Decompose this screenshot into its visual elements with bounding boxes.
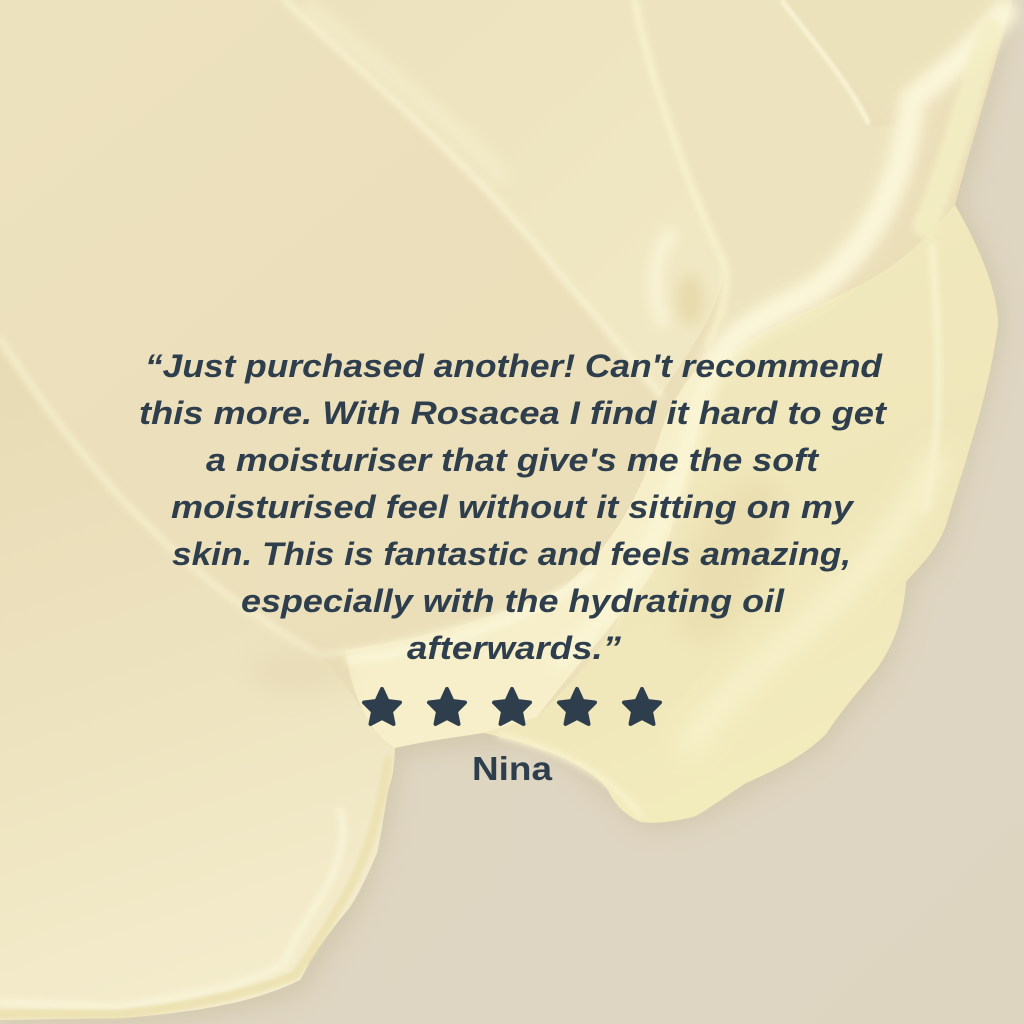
star 3 <box>494 689 530 724</box>
highlight: top band <box>310 8 500 175</box>
highlight: bright curling fold <box>715 12 1005 362</box>
testimonial quote: especially with the hydrating oil <box>241 583 785 619</box>
highlight: central pillar <box>655 235 670 320</box>
testimonial quote: this more. With Rosacea I find it hard to get <box>139 395 888 431</box>
cream: upper right panel <box>635 0 905 362</box>
five star rating <box>364 689 660 724</box>
testimonial quote: afterwards.” <box>407 630 621 666</box>
highlight: lobe top band <box>350 575 590 660</box>
highlight: ridge left <box>285 0 660 395</box>
testimonial quote <box>139 348 888 666</box>
testimonial quote: “Just purchased another! Can't recommend <box>145 348 884 384</box>
highlight: outer pale band <box>925 30 990 225</box>
highlight: fold tip <box>500 735 640 815</box>
cream: lower left fold <box>0 340 395 1020</box>
cream: inner bright lobe <box>345 360 712 748</box>
highlight: left rim outer band <box>0 760 388 1014</box>
cream: top middle panel <box>285 0 725 395</box>
star 5 <box>624 689 660 724</box>
highlight: bottom left rim <box>0 810 343 1007</box>
star 4 <box>559 689 595 724</box>
cream: top right corner panel <box>780 0 1005 118</box>
highlight: top right ridge <box>783 2 868 122</box>
highlight: right lobe band <box>690 460 935 745</box>
highlight: long left ridge <box>0 340 570 655</box>
cream: left fold shading <box>250 650 350 694</box>
cream: right lobe shading <box>656 462 804 658</box>
cream: right lobe <box>483 205 998 823</box>
testimonial quote: a moisturiser that give's me the soft <box>206 442 820 478</box>
star 2 <box>429 689 465 724</box>
star 1 <box>364 689 400 724</box>
cream: valley shading <box>676 274 704 326</box>
highlight: fold continuation <box>560 362 715 660</box>
reviewer name: Nina <box>472 750 553 787</box>
highlight: ridge centre <box>635 0 726 345</box>
testimonial quote: moisturised feel without it sitting on my <box>171 489 855 525</box>
highlight: right vertical streak <box>925 245 938 510</box>
testimonial quote: skin. This is fantastic and feels amazing, <box>172 536 851 572</box>
